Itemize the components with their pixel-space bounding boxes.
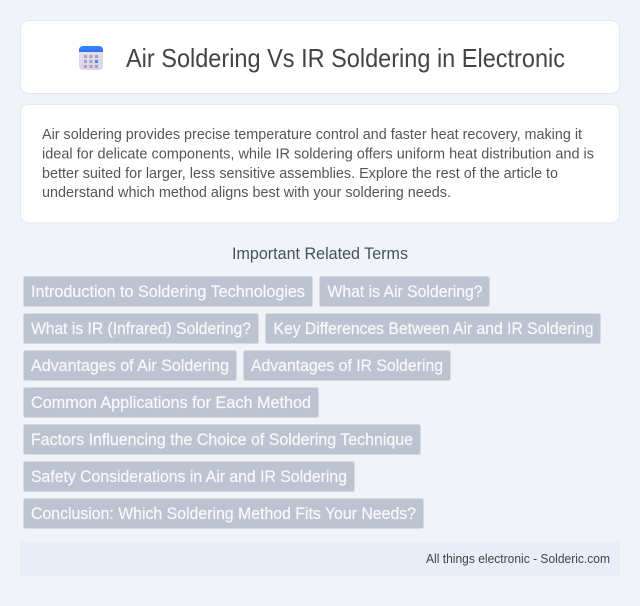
- tag: common applications: Common Applications for Each Method: [31, 393, 311, 412]
- tag: advantages of air: [24, 350, 236, 380]
- tag: what is air soldering: What is Air Soldering?: [328, 282, 482, 301]
- text block: summary: ideal for delicate components, while IR soldering offers uniform heat distribution and is: [42, 146, 594, 162]
- tag: key differences: Key Differences Between Air and IR Soldering: [274, 319, 594, 338]
- tag: what is air soldering: [320, 276, 490, 306]
- text block: summary: understand which method aligns best with your soldering needs.: [42, 184, 451, 201]
- tag: common applications: [24, 388, 318, 418]
- tag: advantages of air: Advantages of Air Soldering: [31, 356, 229, 375]
- footer: All things electronic - Solderic.com: [426, 552, 610, 566]
- text block: summary: Air soldering provides precise temperature control and faster heat recovery, making it: [42, 126, 583, 143]
- tag: safety: Safety Considerations in Air and IR Soldering: [31, 467, 347, 486]
- tag: introduction: [24, 276, 312, 306]
- panel: term tags: [24, 276, 600, 528]
- tag: advantages of IR: [244, 350, 450, 380]
- tag: factors: [24, 424, 420, 454]
- tag: conclusion: [24, 498, 424, 528]
- tag: key differences: [266, 314, 600, 344]
- tag: factors: Factors Influencing the Choice of Soldering Technique: [31, 430, 413, 449]
- heading: related terms: Important Related Terms: [232, 245, 408, 263]
- text block: summary: [42, 126, 594, 201]
- footer: [20, 542, 620, 576]
- tag: conclusion: Conclusion: Which Soldering Method Fits Your Needs?: [31, 504, 416, 523]
- panel: intro text: [20, 104, 620, 223]
- tag: what is IR soldering: [24, 314, 258, 344]
- text block: summary: better suited for larger, less sensitive assemblies. Explore the rest of the article to: [42, 165, 558, 182]
- tag: introduction: Introduction to Soldering Technologies: [31, 282, 305, 301]
- panel: header: [20, 20, 620, 94]
- tag: what is IR soldering: What is IR (Infrared) Soldering?: [31, 319, 251, 338]
- tag: safety: [24, 462, 354, 492]
- icon: calendar: [79, 46, 103, 70]
- tag: advantages of IR: Advantages of IR Soldering: [251, 356, 443, 375]
- title: Air Soldering Vs IR Soldering in Electronic: [126, 43, 565, 73]
